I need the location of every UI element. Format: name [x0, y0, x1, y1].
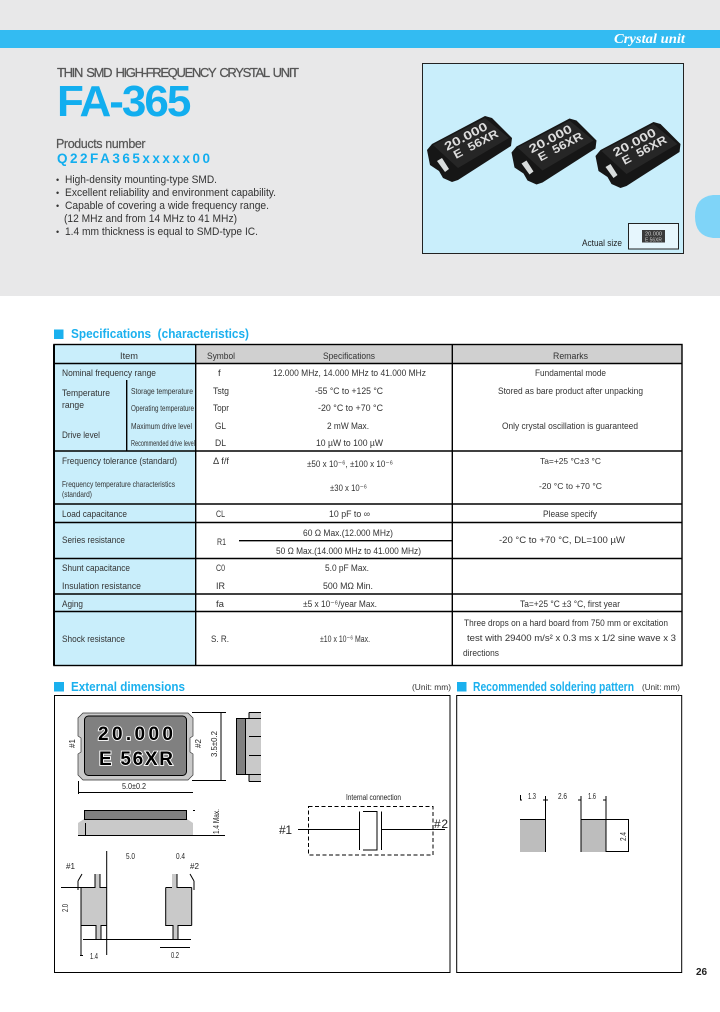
photo: crystal unit 3: 20.000 [610, 125, 659, 160]
row: frequency temperature characteristics: Frequency temperature characteristics [62, 479, 175, 489]
row: temperature range: range [62, 400, 84, 411]
diagram: internal connection: #2 [434, 817, 448, 831]
page number: 26 [696, 967, 707, 978]
row: frequency temperature characteristics: (standard) [62, 489, 92, 499]
actual size inset [628, 224, 678, 249]
drawing: front view [78, 809, 225, 836]
photo: crystal unit 1: E 56XR [452, 128, 501, 162]
row: frequency tolerance: Frequency tolerance (standard) [62, 456, 177, 467]
drawing: bottom view: 0.4 [176, 852, 185, 861]
products number label: Products number [56, 137, 145, 151]
drawing: top view: 5.0±0.2 [122, 782, 146, 791]
drawing: bottom view: #2 [190, 862, 200, 871]
diagram: internal connection [279, 793, 448, 855]
actual size inset: 20.000 [645, 232, 662, 238]
feature list: Capable of covering a wide frequency range. [65, 200, 269, 212]
drawing: solder pads [520, 792, 628, 852]
drawing: bottom view: 1.4 [90, 952, 98, 961]
row: drive level: Only crystal oscillation is guaranteed [502, 421, 638, 432]
row: nominal frequency range [62, 368, 606, 379]
row: load capacitance: Load capacitance [62, 509, 127, 520]
panel: product photo [422, 64, 684, 254]
row: nominal frequency range: f [218, 368, 221, 379]
heading: specifications: Specifications (characteristics) [71, 327, 249, 341]
photo: crystal unit 2: 20.000 [526, 122, 575, 156]
photo: crystal unit 1 [427, 116, 512, 182]
panel: external dimensions [54, 696, 450, 972]
photo: crystal unit 3: E 56XR [620, 134, 670, 168]
row: frequency tolerance: Δ f/f [213, 456, 229, 467]
drawing: bottom view: 5.0 [126, 852, 135, 861]
feature list: High-density mounting-type SMD. [65, 174, 217, 186]
row: series resistance: 50 Ω Max.(14.000 MHz to 41.000 MHz) [276, 546, 421, 557]
feature list: • [56, 227, 59, 237]
row: aging: Aging [62, 599, 83, 610]
row: shunt capacitance and insulation resistance: 500 MΩ Min. [323, 581, 373, 592]
drawing: bottom view [61, 851, 200, 961]
photo: crystal unit 2 [512, 118, 596, 184]
subtitle: THIN SMD HIGH-FREQUENCY CRYSTAL UNIT [57, 65, 299, 80]
row: shunt capacitance and insulation resistance: Shunt capacitance [62, 563, 130, 574]
table header row: Item [120, 351, 138, 362]
row: aging: fa [216, 599, 225, 610]
row: temperature range: Topr [213, 403, 229, 414]
row: shunt capacitance and insulation resistance [62, 563, 373, 592]
row: drive level: DL [215, 438, 226, 449]
row: nominal frequency range: Fundamental mode [535, 368, 606, 379]
drawing: bottom view: 0.2 [171, 951, 179, 960]
row: nominal frequency range: 12.000 MHz, 14.000 MHz to 41.000 MHz [273, 368, 426, 379]
table header row: Symbol [207, 351, 235, 362]
row: load capacitance: CL [216, 509, 225, 520]
title: FA-365 [57, 77, 191, 126]
row: series resistance: R1 [217, 537, 226, 548]
row: temperature range: Tstg [213, 386, 229, 397]
row: drive level: Recommended drive level [131, 438, 195, 448]
row: shock resistance: Three drops on a hard board from 750 mm or excitation [464, 618, 668, 629]
row: shock resistance: test with 29400 m/s² x 0.3 ms x 1/2 sine wave x 3 [467, 633, 676, 644]
row: temperature range: -20 °C to +70 °C [318, 403, 383, 414]
row: series resistance: -20 °C to +70 °C, DL=100 µW [499, 535, 625, 546]
products number: Q22FA365xxxxx00 [57, 151, 210, 166]
panel: recommended soldering pattern [457, 696, 682, 972]
drawing: front view: 1.4 Max. [212, 809, 221, 834]
heading: recommended soldering pattern: Recommended soldering pattern [473, 680, 634, 694]
drawing: top view: 3.5±0.2 [210, 730, 219, 757]
drawing: bottom view: 2.0 [61, 904, 70, 912]
feature list: • [56, 175, 59, 185]
table header row [120, 351, 588, 362]
drawing: bottom view: #1 [66, 862, 76, 871]
feature list [56, 174, 276, 238]
unit note: soldering pattern: (Unit: mm) [642, 682, 680, 692]
feature list: • [56, 188, 59, 198]
row: temperature range [62, 386, 643, 414]
drawing: top view: #1 [68, 739, 77, 748]
row: frequency tolerance [62, 456, 601, 470]
category band [0, 30, 720, 48]
drawing: top view: #2 [194, 739, 203, 748]
row: aging: Ta=+25 °C ±3 °C, first year [520, 599, 620, 610]
photo: crystal unit 1: 20.000 [442, 119, 490, 154]
row: drive level: Drive level [62, 430, 100, 441]
category band: Crystal unit [614, 32, 686, 47]
unit note: external dimensions: (Unit: mm) [412, 682, 451, 692]
heading: external dimensions: External dimensions [71, 680, 185, 694]
row: drive level: 2 mW Max. [327, 421, 369, 432]
row: series resistance [62, 528, 625, 557]
row: load capacitance: Please specify [543, 509, 597, 520]
row: drive level [62, 421, 638, 449]
drawing: solder pads: 2.6 [558, 792, 567, 801]
row: frequency temperature characteristics: ±30 x 10⁻⁶ [330, 483, 367, 494]
row: shock resistance [62, 618, 676, 659]
section tab [695, 195, 720, 238]
row: drive level: 10 µW to 100 µW [316, 438, 383, 449]
row: drive level: Maximum drive level [131, 421, 192, 431]
row: series resistance: 60 Ω Max.(12.000 MHz) [303, 528, 393, 539]
drawing: solder pads: 1.3 [528, 792, 536, 801]
row: temperature range: Stored as bare product after unpacking [498, 386, 643, 397]
row: temperature range: Storage temperature [131, 386, 193, 396]
row: shunt capacitance and insulation resistance: Insulation resistance [62, 581, 141, 592]
row: frequency tolerance: Ta=+25 °C±3 °C [540, 456, 601, 466]
photo: crystal unit 3 [596, 122, 680, 188]
row: nominal frequency range: Nominal frequency range [62, 368, 156, 379]
row: shunt capacitance and insulation resistance: IR [216, 581, 225, 592]
drawing: top view: 20.000 [98, 724, 173, 745]
diagram: internal connection: Internal connection [346, 793, 401, 802]
row: shunt capacitance and insulation resistance: 5.0 pF Max. [325, 563, 369, 574]
row: shock resistance: ±10 x 10⁻⁶ Max. [320, 634, 370, 645]
specifications table [54, 344, 682, 666]
row: load capacitance [62, 509, 597, 520]
row: frequency temperature characteristics: -20 °C to +70 °C [539, 481, 602, 491]
photo: crystal unit 2: E 56XR [536, 130, 586, 164]
table header row: Remarks [553, 351, 588, 362]
feature list: Excellent reliability and environment capability. [65, 187, 276, 199]
diagram: internal connection: #1 [279, 823, 292, 837]
header panel [0, 0, 720, 296]
drawing: top view [68, 712, 226, 794]
row: temperature range: Temperature [62, 388, 110, 399]
row: shock resistance: directions [463, 648, 499, 659]
drawing: side view [236, 712, 261, 782]
actual size label: Actual size [582, 238, 622, 249]
actual size inset: E 56XR [645, 238, 662, 244]
row: frequency temperature characteristics [62, 479, 602, 499]
feature list: • [56, 201, 59, 211]
row: aging [62, 599, 620, 610]
row: series resistance: Series resistance [62, 535, 125, 546]
row: frequency tolerance: ±50 x 10⁻⁶, ±100 x 10⁻⁶ [307, 459, 393, 470]
drawing: solder pads: 1.6 [588, 792, 596, 801]
drawing: solder pads: 2.4 [619, 832, 628, 841]
feature list: 1.4 mm thickness is equal to SMD-type IC. [65, 226, 258, 238]
row: temperature range: -55 °C to +125 °C [315, 386, 383, 397]
row: aging: ±5 x 10⁻⁶/year Max. [303, 599, 377, 610]
row: shock resistance: Shock resistance [62, 634, 125, 645]
drawing: top view: E 56XR [99, 749, 173, 770]
row: temperature range: Operating temperature [131, 403, 194, 413]
row: shunt capacitance and insulation resistance: C0 [216, 563, 225, 574]
feature list: (12 MHz and from 14 MHz to 41 MHz) [64, 213, 237, 225]
row: load capacitance: 10 pF to ∞ [329, 509, 370, 520]
row: shock resistance: S. R. [211, 634, 229, 645]
table header row: Specifications [323, 351, 375, 362]
row: drive level: GL [215, 421, 226, 432]
